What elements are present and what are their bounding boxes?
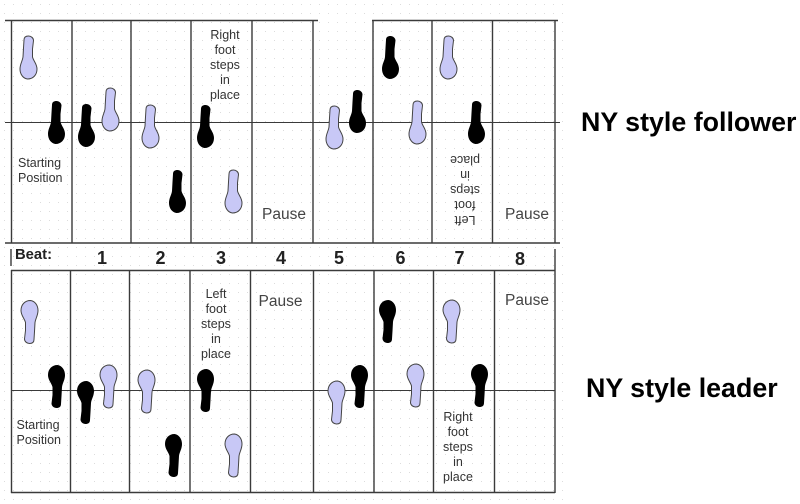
beat numbers: 6 — [395, 248, 406, 268]
follower foot: start dark — [48, 101, 65, 144]
follower foot: start light — [20, 36, 37, 79]
beat numbers: 8 — [515, 249, 525, 269]
leader foot: beat 2 light — [138, 370, 155, 413]
follower foot: beat 6 dark — [382, 36, 399, 79]
follower foot: beat 2 dark — [169, 170, 186, 213]
follower text: starting position: Position — [18, 171, 63, 185]
heading: NY style follower: NY style follower — [581, 107, 797, 137]
follower foot: beat 2 light — [142, 105, 159, 148]
leader text: left foot steps in place: steps — [201, 317, 231, 331]
beat numbers: 5 — [334, 248, 344, 268]
follower text: pause beat 8: Pause — [505, 206, 549, 223]
follower text: right foot steps in place: Right — [210, 28, 240, 42]
follower foot: beat 3 light — [225, 170, 242, 213]
follower foot: beat 3 dark — [197, 105, 214, 148]
leader text: left foot steps in place: foot — [206, 302, 227, 316]
follower text: upside-down left foot steps in place: foot — [454, 198, 475, 212]
leader text: right foot steps in place: Right — [443, 410, 473, 424]
leader foot: beat 7 light — [443, 300, 460, 343]
follower foot: beat 1 dark — [78, 104, 95, 147]
leader foot: beat 1 dark — [77, 381, 94, 424]
leader foot: beat 3 dark — [197, 369, 214, 412]
follower text: upside-down left foot steps in place: in — [460, 168, 470, 182]
leader text: starting position: Starting — [16, 418, 60, 432]
leader foot: beat 3 light — [225, 434, 242, 477]
follower text: right foot steps in place: steps — [210, 58, 240, 72]
follower foot: beat 7 dark — [468, 101, 485, 144]
leader text: left foot steps in place: Left — [206, 287, 227, 301]
leader foot: beat 2 dark — [165, 434, 182, 477]
panel: NY style leader footwork chart — [11, 270, 555, 493]
beat numbers: 1 — [97, 248, 107, 268]
leader foot: beat 1 light — [100, 365, 117, 408]
leader foot: beat 5 light — [328, 381, 345, 424]
leader text: left foot steps in place: place — [201, 347, 231, 361]
leader foot: start dark — [48, 365, 65, 408]
beat numbers: 3 — [216, 248, 226, 268]
beat numbers: 4 — [276, 248, 286, 268]
follower text: upside-down left foot steps in place: Left — [454, 213, 475, 227]
follower text: upside-down left foot steps in place: place — [450, 153, 480, 167]
leader text: pause beat 4: Pause — [259, 293, 302, 310]
follower foot: beat 7 light — [440, 36, 457, 79]
beat label: Beat: — [15, 247, 52, 263]
leader text: right foot steps in place: in — [453, 455, 463, 469]
leader foot: beat 6 dark — [379, 300, 396, 343]
leader foot: beat 6 light — [407, 364, 424, 407]
follower foot: beat 6 light — [409, 101, 426, 144]
beat number row — [11, 247, 555, 270]
leader text: starting position: Position — [16, 433, 61, 447]
panel: NY style follower footwork chart — [5, 20, 560, 243]
leader foot: start light — [21, 300, 38, 344]
leader foot: beat 7 dark — [471, 364, 488, 407]
leader text: right foot steps in place: foot — [448, 425, 469, 439]
follower text: upside-down left foot steps in place: steps — [450, 183, 480, 197]
follower text: right foot steps in place: in — [220, 73, 230, 87]
leader foot: beat 5 dark — [351, 365, 368, 408]
follower text: starting position: Starting — [18, 156, 61, 170]
beat numbers: 2 — [155, 248, 166, 268]
follower foot: beat 1 light — [102, 88, 119, 131]
heading: NY style leader: NY style leader — [586, 373, 778, 403]
leader text: left foot steps in place: in — [211, 332, 221, 346]
leader text: right foot steps in place: steps — [443, 440, 473, 454]
follower foot: beat 5 light — [326, 106, 343, 149]
leader text: right foot steps in place: place — [443, 470, 473, 484]
leader text: pause beat 8: Pause — [505, 292, 549, 309]
follower text: right foot steps in place: place — [210, 88, 240, 102]
follower text: right foot steps in place: foot — [215, 43, 236, 57]
follower foot: beat 5 dark — [349, 90, 366, 133]
beat numbers: 7 — [454, 248, 465, 268]
follower text: pause beat 4: Pause — [262, 206, 306, 223]
